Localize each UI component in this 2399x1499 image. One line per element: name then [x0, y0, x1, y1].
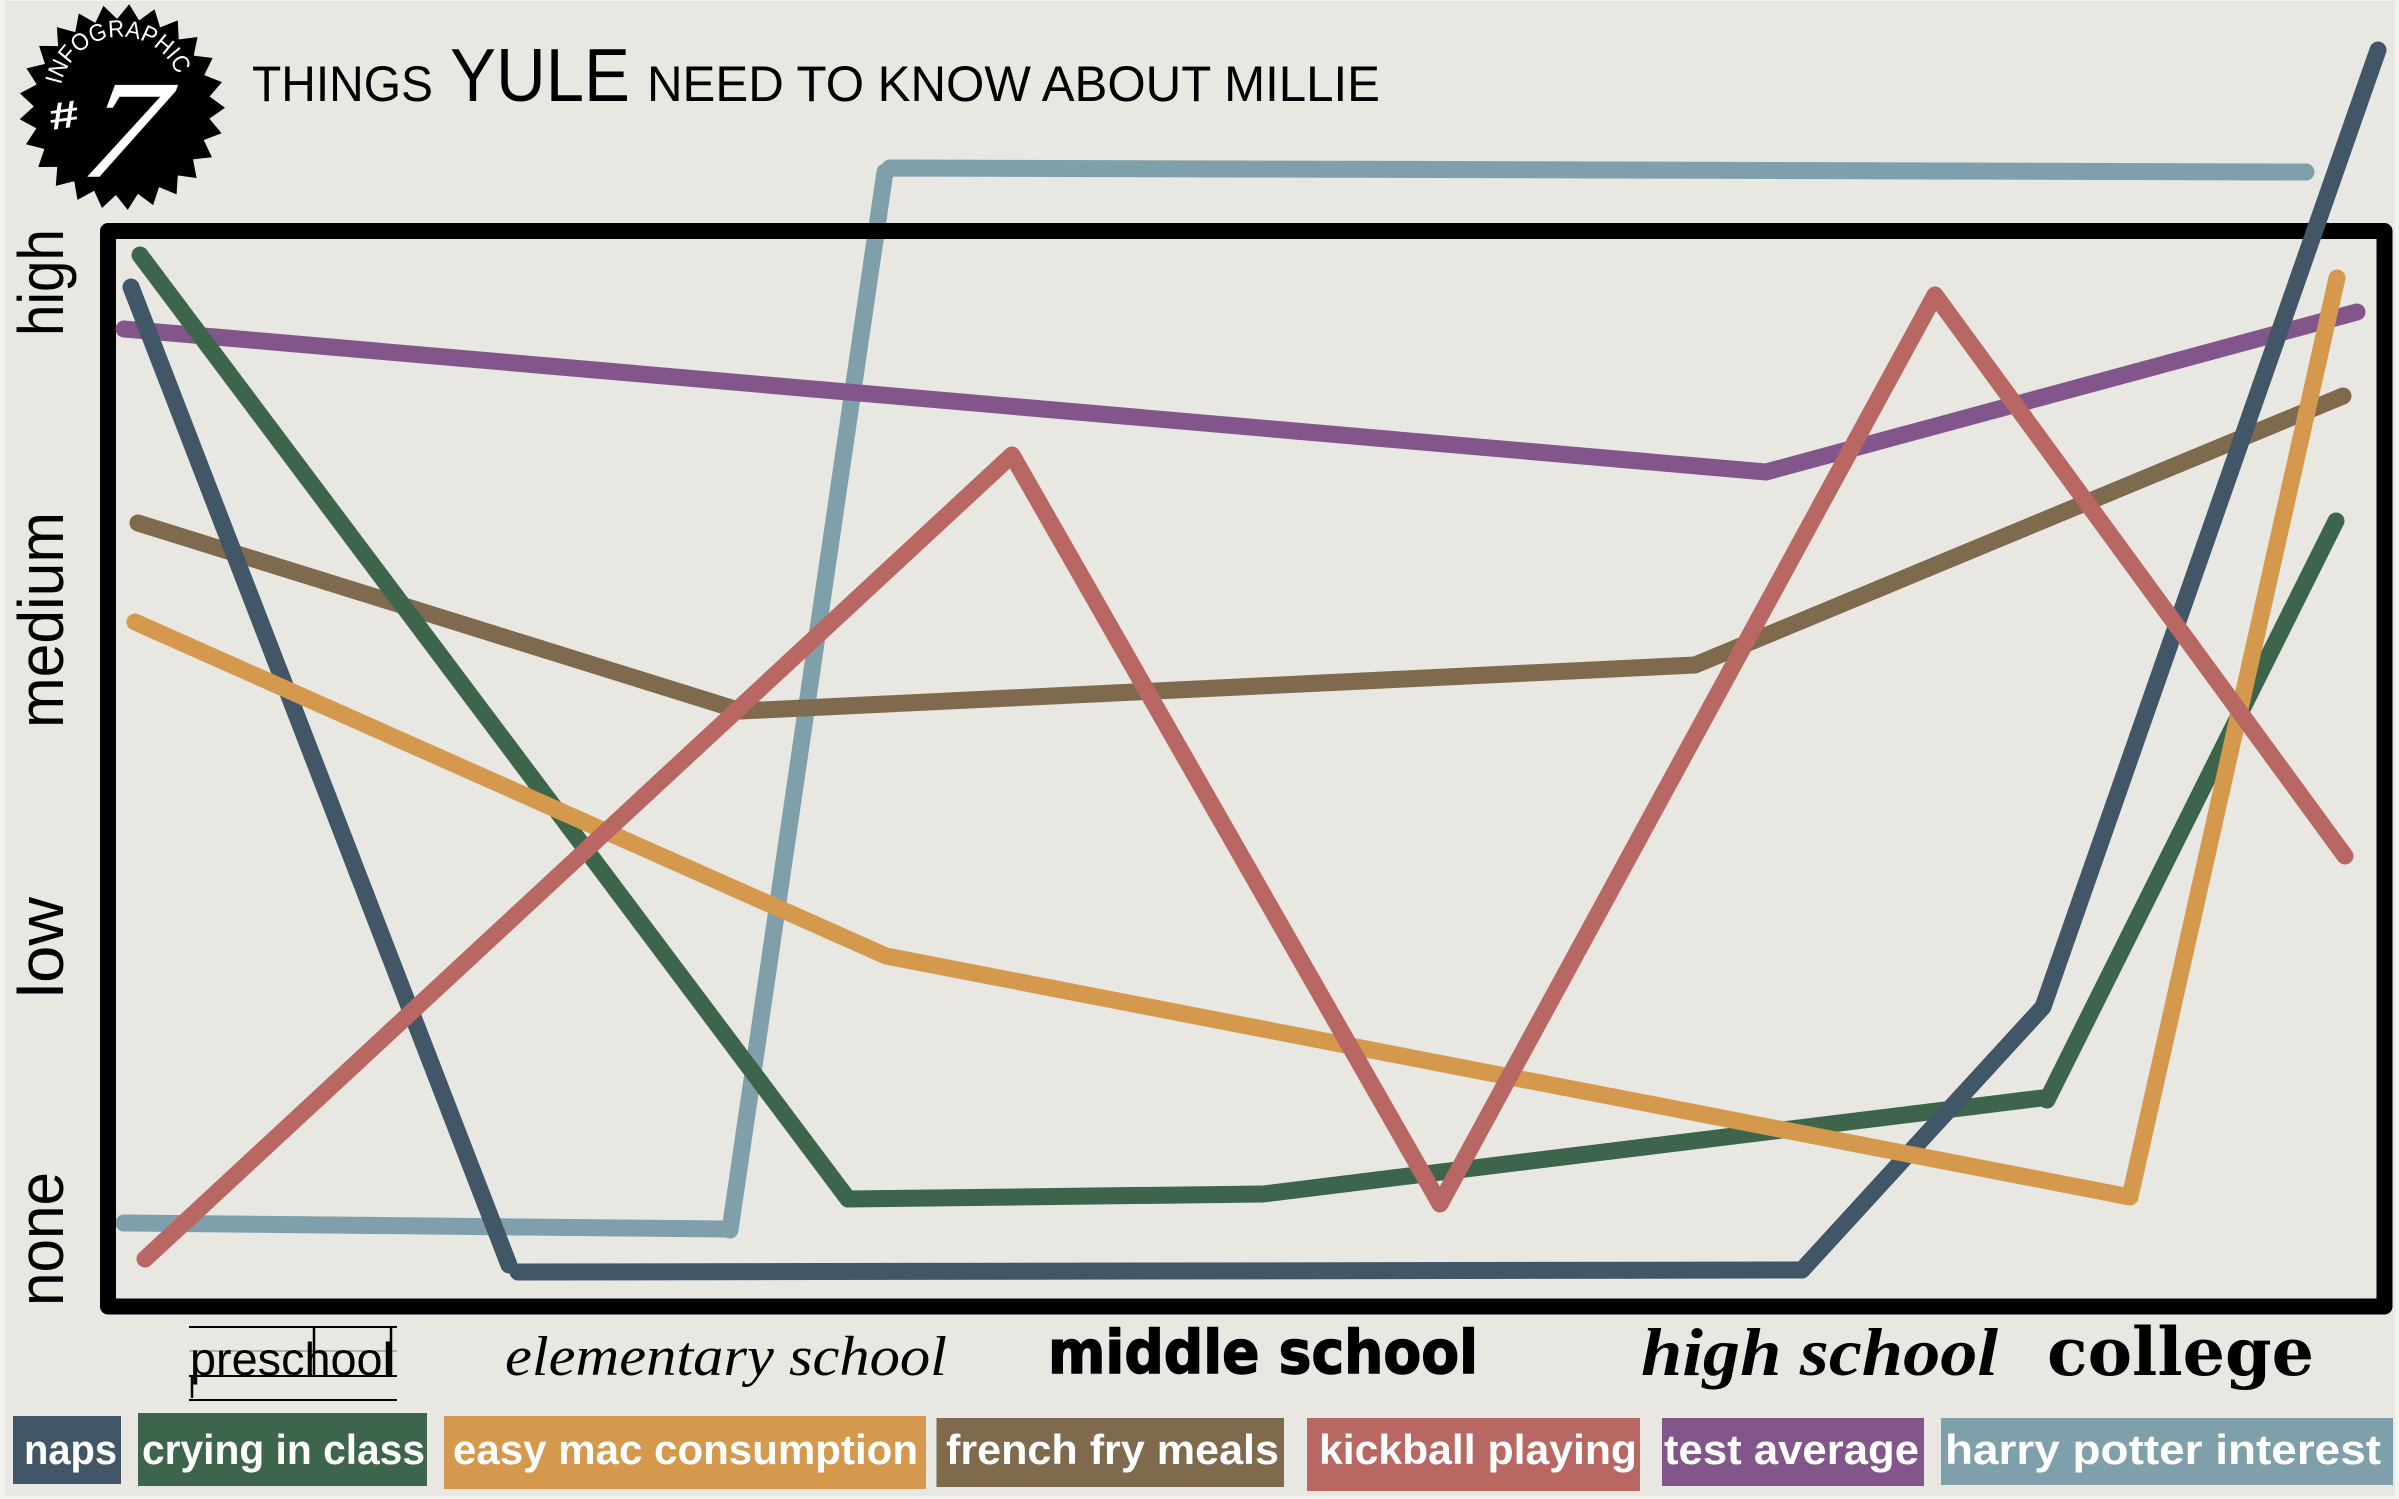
icon: infographic number 7 badge — [20, 4, 225, 210]
line: easy mac consumption — [135, 278, 2337, 1197]
legend: easy mac consumption: easy mac consumption — [453, 1426, 918, 1473]
legend: french fry meals: french fry meals — [946, 1426, 1279, 1473]
legend: naps — [13, 1416, 121, 1484]
line: naps — [131, 50, 2378, 1272]
icon: infographic number 7 badge: # — [46, 92, 81, 138]
legend: french fry meals — [936, 1418, 1284, 1487]
legend: crying in class: crying in class — [142, 1426, 425, 1473]
y axis label: medium: medium — [5, 512, 77, 728]
line: crying in class — [140, 255, 2336, 1199]
legend: easy mac consumption — [444, 1416, 926, 1489]
title: YULE — [450, 33, 630, 117]
line: french fry meals — [138, 396, 2343, 711]
title: THINGS — [252, 56, 433, 112]
legend: naps: naps — [24, 1426, 117, 1473]
legend: test average — [1662, 1418, 1924, 1486]
x axis label: high school: high school — [1641, 1314, 1998, 1390]
legend: harry potter interest — [1941, 1418, 2393, 1485]
x axis label: elementary school: elementary school — [505, 1326, 947, 1388]
line: kickball playing — [145, 295, 2345, 1259]
icon: infographic number 7 badge: 7 — [75, 53, 184, 206]
y axis label: none: none — [5, 1172, 77, 1306]
y axis label: low: low — [5, 896, 77, 998]
x axis label: preschool: preschool — [190, 1333, 393, 1385]
x axis label: preschool — [189, 1327, 397, 1400]
line: harry potter interest — [124, 168, 2306, 1230]
x axis label: middle school: middle school — [1048, 1318, 1478, 1388]
legend: crying in class — [138, 1413, 427, 1486]
y axis label: high: high — [5, 229, 77, 336]
x axis label: college: college — [2047, 1313, 2314, 1391]
legend: kickball playing: kickball playing — [1319, 1426, 1637, 1473]
title: NEED TO KNOW ABOUT MILLIE — [647, 56, 1380, 112]
line: test average — [124, 312, 2357, 472]
legend: test average: test average — [1664, 1426, 1919, 1473]
legend: kickball playing — [1307, 1418, 1640, 1491]
legend: harry potter interest: harry potter interest — [1945, 1426, 2381, 1473]
title — [252, 33, 1380, 117]
icon: infographic number 7 badge: INFOGRAPHIC — [46, 20, 190, 83]
chart frame — [108, 231, 2384, 1306]
